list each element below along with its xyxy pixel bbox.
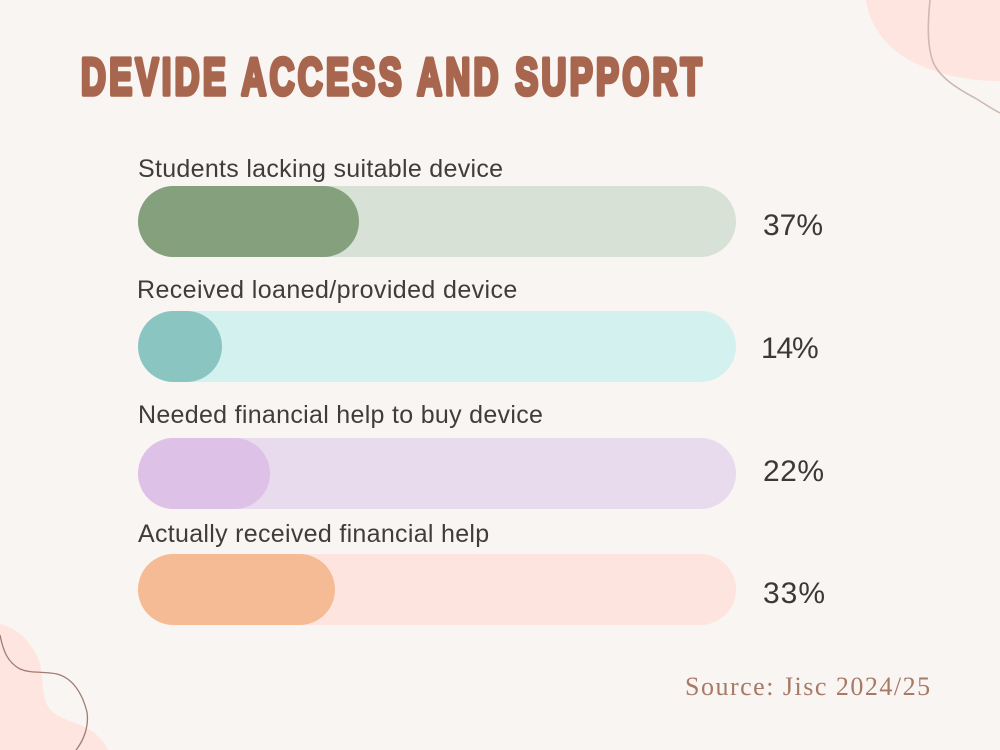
row 4 value: 33%: [763, 577, 826, 610]
row 3 value: 22%: [763, 455, 825, 488]
row 2 value: 14%: [761, 332, 817, 365]
row 2 bar: [138, 311, 736, 382]
top-right blob: [866, 0, 1000, 113]
bottom-left blob: [0, 624, 108, 750]
row 1 label: Students lacking suitable device: [138, 155, 503, 183]
source note: Source: Jisc 2024/25: [685, 672, 932, 701]
row 2 label: Received loaned/provided device: [137, 276, 518, 304]
row 3 label: Needed financial help to buy device: [138, 401, 543, 429]
row 1 bar: [138, 186, 736, 257]
row 4 label: Actually received financial help: [138, 520, 489, 548]
row 4 bar: [138, 554, 736, 625]
row 1 value: 37%: [763, 209, 823, 242]
row 3 bar: [138, 438, 736, 509]
